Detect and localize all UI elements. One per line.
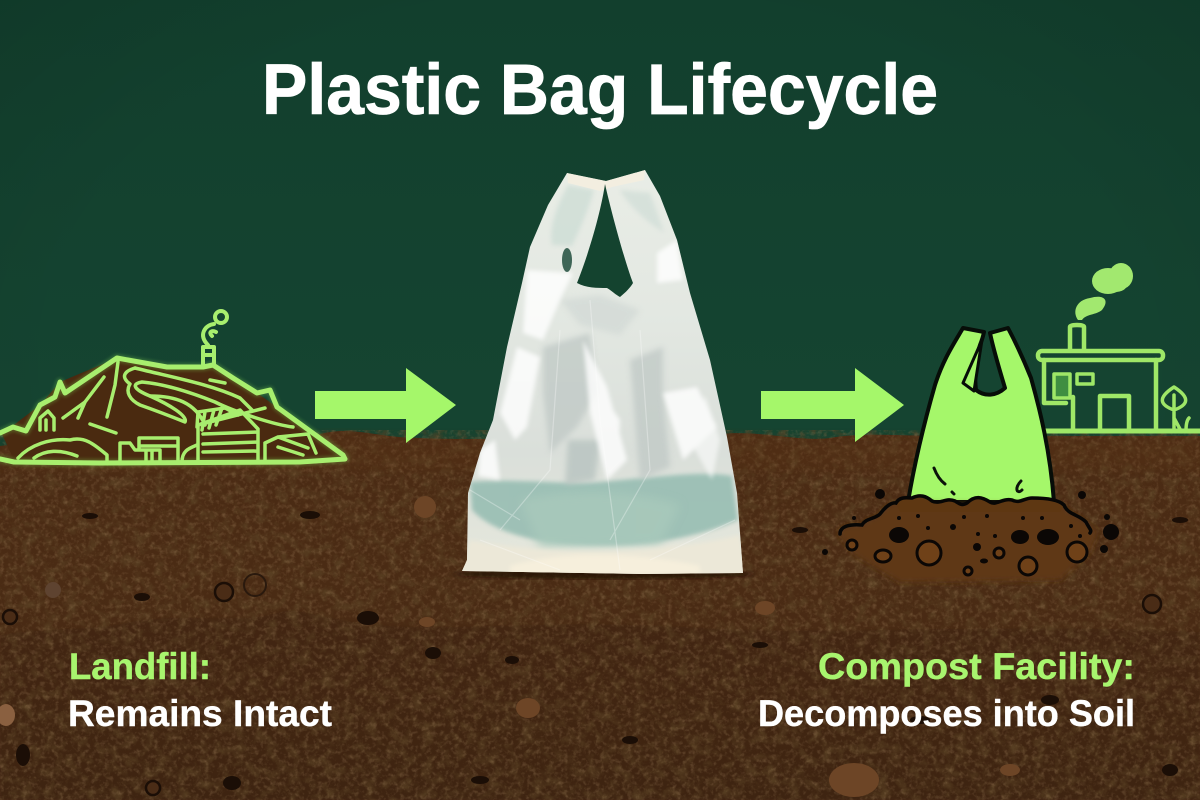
grey folds: [543, 295, 670, 485]
tree: [1162, 387, 1189, 431]
icon: compost facility: [1038, 325, 1200, 431]
icon: smoke puffs: [1075, 263, 1133, 320]
icon: landfill mound: [0, 311, 345, 463]
teal contents: [470, 474, 738, 545]
shed building: [197, 408, 265, 462]
small building: [120, 438, 178, 460]
soil stones: [16, 511, 1188, 790]
compost mound: [838, 503, 1098, 582]
label: landfill: Landfill:: [69, 646, 211, 687]
terraces: [107, 362, 118, 417]
label: compost facility: [758, 646, 1135, 734]
label: landfill: Remains Intact: [68, 693, 332, 734]
arrow: bag to compost: [761, 368, 904, 442]
title: Plastic Bag Lifecycle: [262, 51, 938, 130]
handle opening: [577, 184, 633, 297]
label: compost facility: Decomposes into Soil: [758, 693, 1135, 734]
handle knot: [567, 170, 645, 191]
mound interior: [2, 358, 345, 460]
icon: green bag in soil: [822, 328, 1119, 582]
handle tint: [551, 185, 594, 246]
ring stones: [3, 583, 1161, 795]
compost pebbles: [822, 489, 1119, 564]
mound outline: [0, 358, 345, 463]
left hut: [40, 411, 54, 430]
soil ground: [0, 430, 1200, 800]
arrow: landfill to bag: [315, 368, 456, 443]
label: compost facility: Compost Facility:: [818, 646, 1135, 687]
wrinkle lines: [470, 300, 735, 570]
photo: plastic bag: [454, 170, 754, 579]
soil horizon band: [0, 611, 1200, 800]
chimney and smoke: [203, 347, 214, 366]
mound outline glow: [0, 358, 345, 463]
white highlights: [478, 240, 720, 480]
label: landfill: [68, 646, 332, 734]
